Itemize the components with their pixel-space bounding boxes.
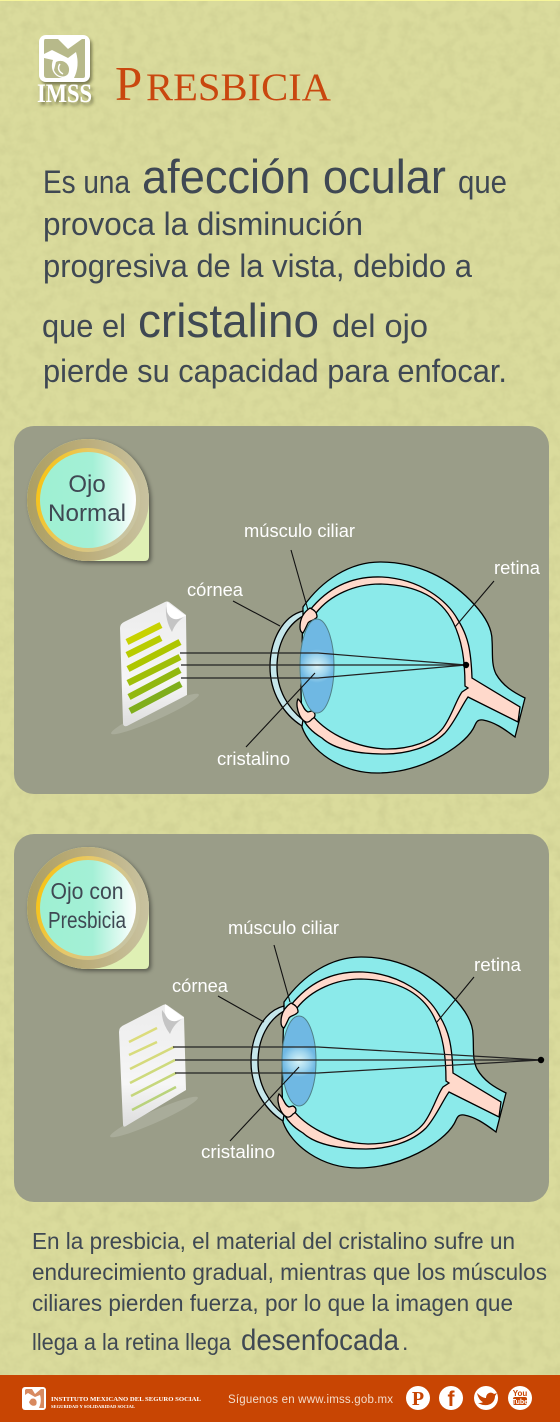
explanation text xyxy=(32,1228,547,1357)
explanation text: . xyxy=(402,1329,408,1355)
retina xyxy=(283,972,501,1149)
explanation text: desenfocada xyxy=(241,1324,399,1357)
labels: normal xyxy=(187,521,541,769)
icon: pinterest: P xyxy=(412,1388,424,1410)
cornea xyxy=(251,1006,284,1121)
footer website: Síguenos en www.imss.gob.mx xyxy=(228,1394,393,1406)
intro text: que el xyxy=(42,308,126,344)
labels: normal: músculo ciliar xyxy=(244,521,355,541)
intro text: afección ocular xyxy=(142,150,446,203)
eye diagram: presbicia xyxy=(251,957,506,1168)
icon: facebook xyxy=(439,1386,463,1411)
badge: ojo con presbicia: Ojo con xyxy=(50,878,124,904)
icon: facebook: f xyxy=(448,1388,456,1411)
icon: twitter xyxy=(474,1386,498,1410)
labels: normal: cristalino xyxy=(217,749,290,769)
footer institution: SEGURIDAD Y SOLIDARIDAD SOCIAL xyxy=(51,1404,135,1409)
document: blurred text xyxy=(108,1004,200,1142)
badge: ojo normal: Ojo xyxy=(68,471,106,498)
explanation text: En la presbicia, el material del cristalino sufre un xyxy=(32,1228,515,1254)
eye diagram: normal xyxy=(270,562,525,773)
icon: youtube: You xyxy=(513,1389,527,1398)
panel: ojo normal xyxy=(14,426,549,794)
panel: ojo con presbicia xyxy=(14,834,549,1202)
intro text: provoca la disminución xyxy=(43,206,363,242)
title: P xyxy=(115,56,142,111)
intro text: del ojo xyxy=(332,308,428,344)
intro text: Es una xyxy=(43,164,131,200)
title xyxy=(115,56,331,111)
ciliary muscle lower xyxy=(278,1094,296,1117)
badge: ojo normal xyxy=(27,439,149,561)
intro text: cristalino xyxy=(138,294,319,347)
logo: IMSS xyxy=(37,35,92,108)
footer institution: INSTITUTO MEXICANO DEL SEGURO SOCIAL xyxy=(51,1396,202,1403)
explanation text: ciliares pierden fuerza, por lo que la imagen que xyxy=(32,1290,513,1316)
ciliary muscle xyxy=(281,1003,298,1028)
icon: pinterest xyxy=(406,1386,430,1410)
lens xyxy=(300,619,334,713)
light rays xyxy=(180,653,469,678)
title: RESBICIA xyxy=(146,66,331,109)
labels: presbicia xyxy=(172,918,522,1162)
logo wordmark: IMSS xyxy=(37,79,92,108)
intro text: que xyxy=(458,164,507,200)
light rays xyxy=(173,1047,544,1073)
explanation text: endurecimiento gradual, mientras que los músculos xyxy=(32,1259,547,1285)
footer institution xyxy=(51,1396,202,1409)
labels: presbicia: cristalino xyxy=(201,1142,275,1162)
icon: youtube xyxy=(508,1386,532,1410)
footer bar xyxy=(0,1375,560,1422)
intro text xyxy=(42,150,507,389)
labels: presbicia: retina xyxy=(474,955,522,975)
lens xyxy=(282,1016,316,1106)
intro text: pierde su capacidad para enfocar. xyxy=(43,353,507,389)
footer logo xyxy=(22,1387,46,1410)
badge: ojo normal: Normal xyxy=(48,500,126,527)
explanation text: llega a la retina llega xyxy=(32,1329,231,1355)
retina xyxy=(302,577,520,754)
labels: normal: retina xyxy=(494,558,541,578)
labels: presbicia: córnea xyxy=(172,976,229,996)
ciliary muscle lower xyxy=(297,699,315,722)
icon: youtube: Tube xyxy=(512,1399,528,1406)
intro text: progresiva de la vista, debido a xyxy=(43,248,473,284)
labels: normal: córnea xyxy=(187,580,244,600)
cornea xyxy=(270,611,303,726)
labels: presbicia: músculo ciliar xyxy=(228,918,339,938)
document: clear text xyxy=(109,602,201,739)
ciliary muscle xyxy=(300,608,317,633)
badge: ojo con presbicia: Presbicia xyxy=(48,907,126,933)
badge: ojo con presbicia xyxy=(27,847,149,969)
